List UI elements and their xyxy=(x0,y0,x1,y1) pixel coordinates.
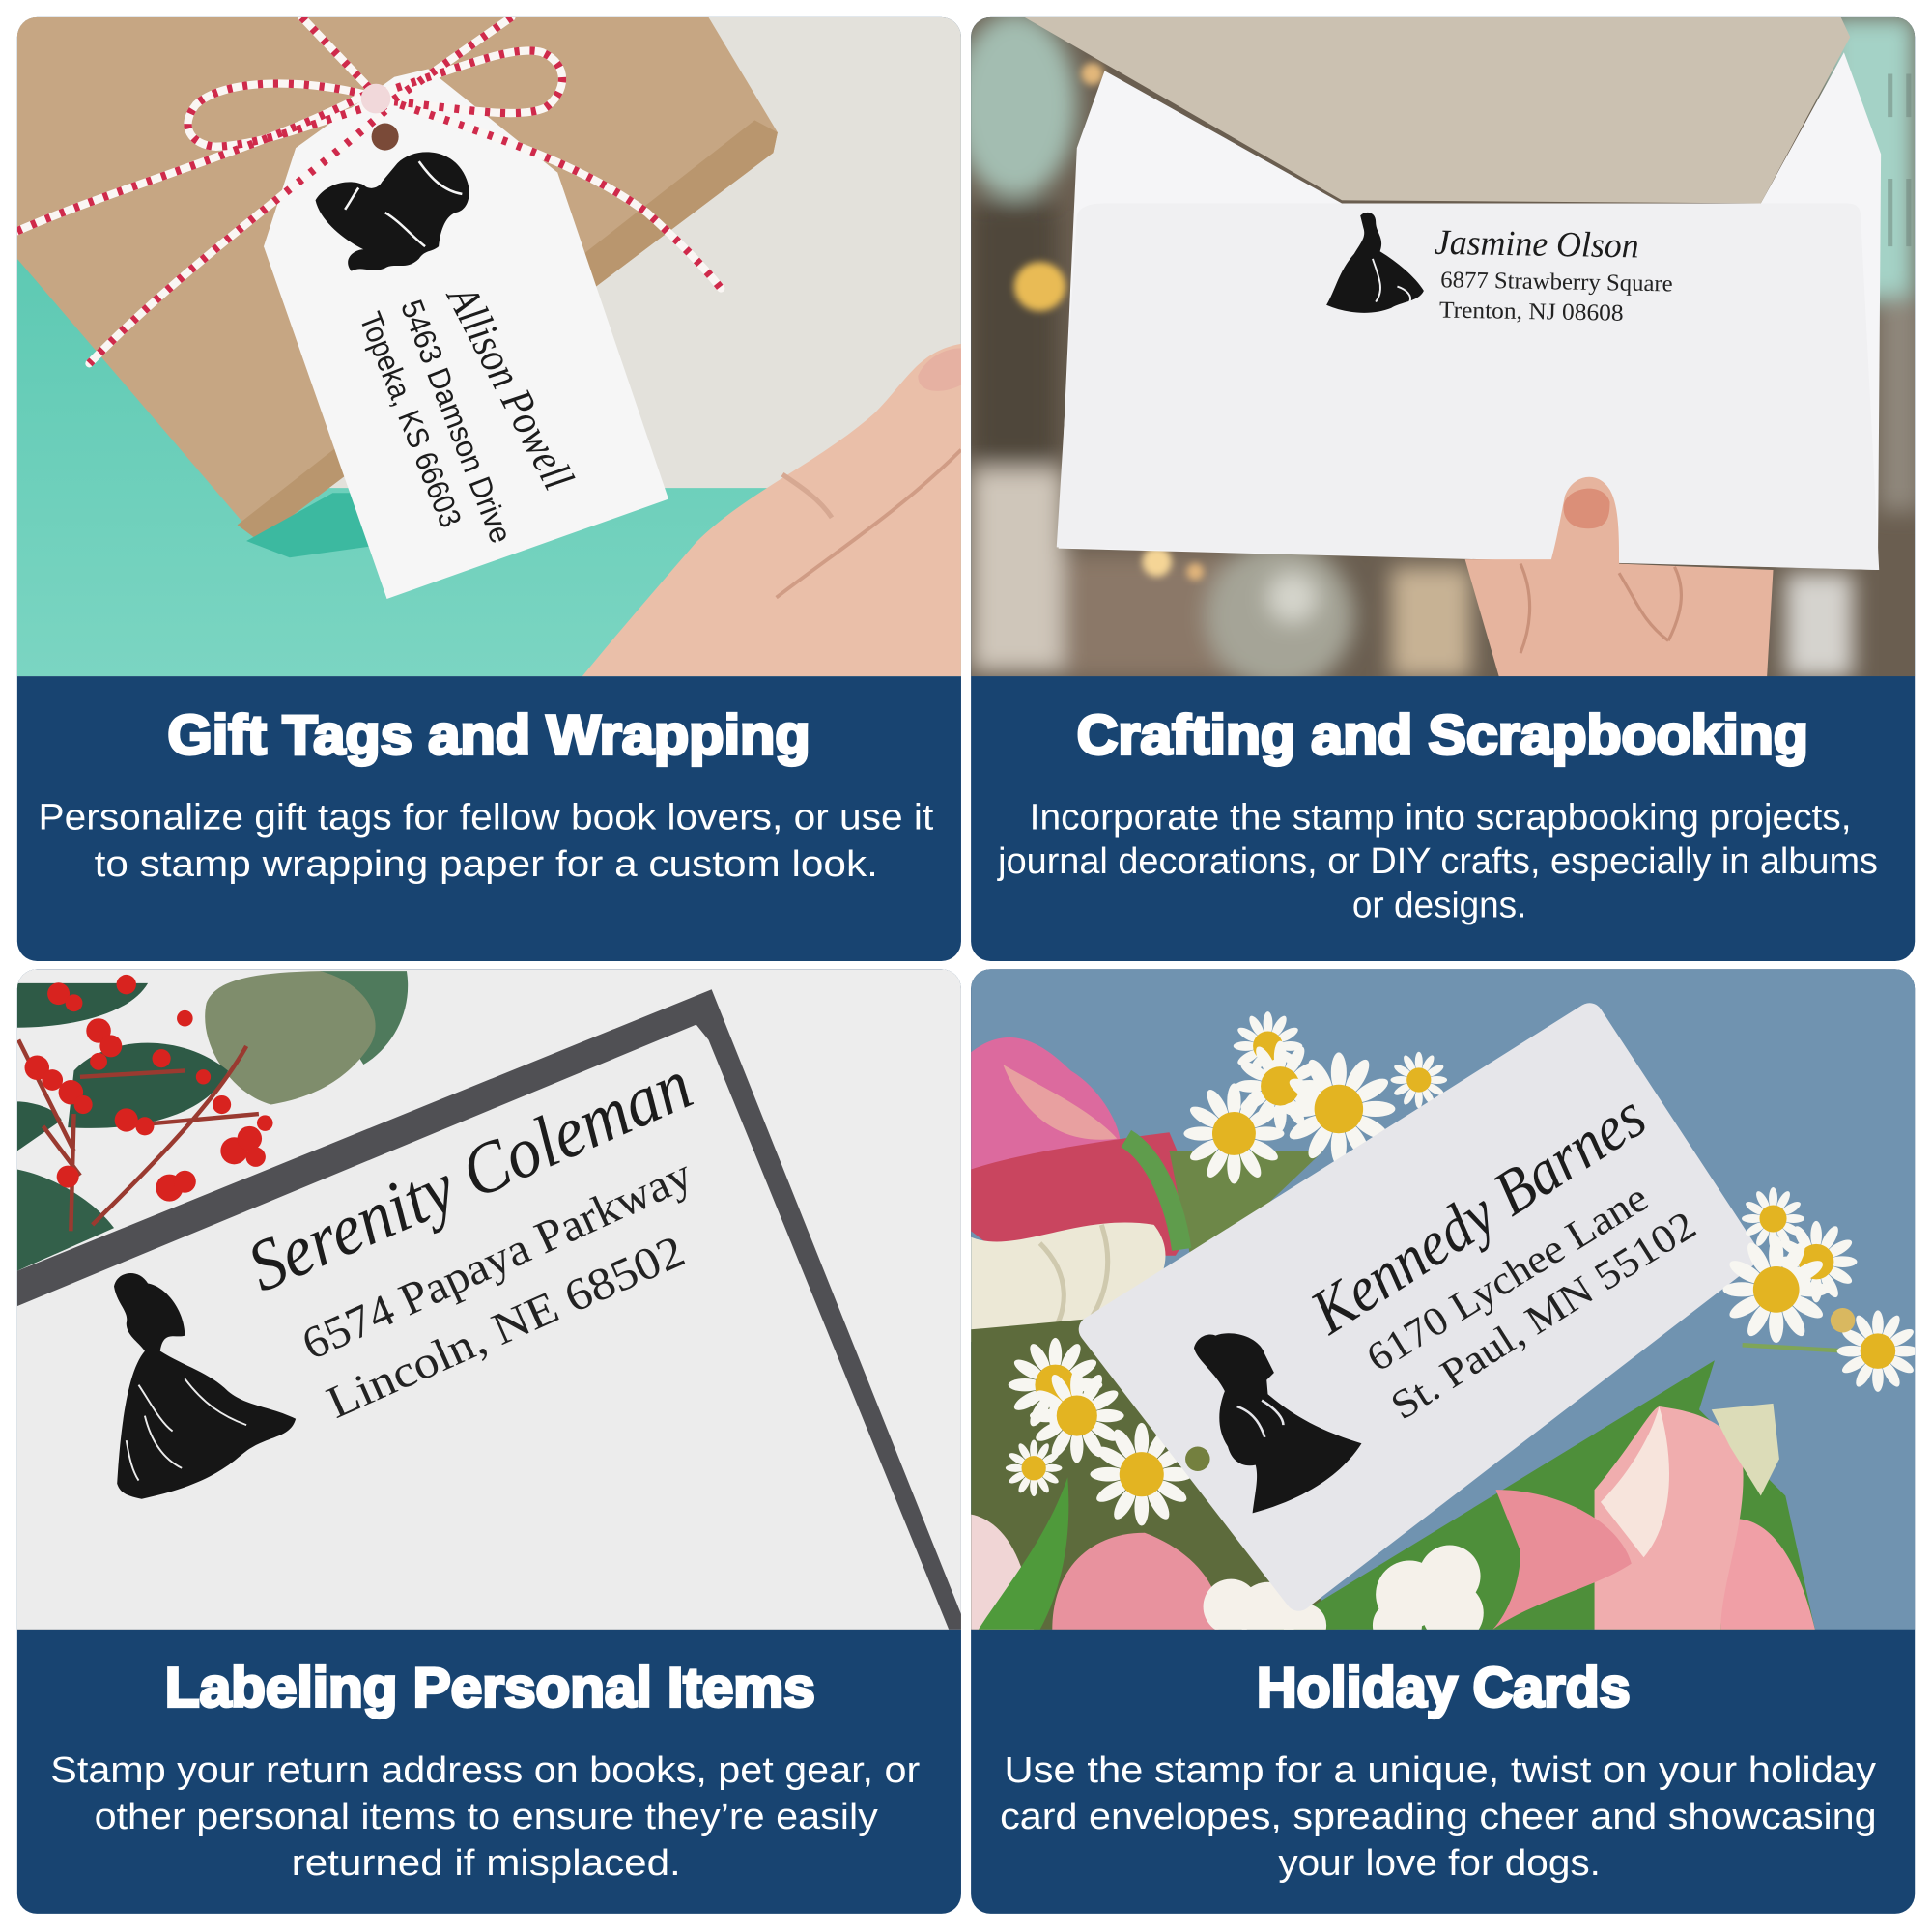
stamp: name: Allison Powell xyxy=(437,275,583,497)
daisies behind card xyxy=(1006,1011,1447,1526)
book page xyxy=(17,1025,949,1630)
description line 1: Personalize gift tags for fellow book lovers, or use it xyxy=(39,796,934,838)
description line 2: card envelopes, spreading cheer and showcasing xyxy=(1000,1796,1877,1837)
heading: Holiday Cards xyxy=(1257,1658,1631,1719)
bouquet behind card xyxy=(971,1037,1868,1650)
description line 2: journal decorations, or DIY crafts, especially in albums xyxy=(997,840,1878,882)
description line 1: Stamp your return address on books, pet gear, or xyxy=(50,1749,921,1791)
panel: holiday cards xyxy=(971,969,1918,1914)
tag xyxy=(264,69,668,599)
stamp: princess gown silhouette xyxy=(114,1273,296,1499)
stamp: name: Kennedy Barnes xyxy=(1298,1081,1658,1349)
stamp: city line: Lincoln, NE 68502 xyxy=(320,1226,692,1429)
photo: gift box with tag xyxy=(17,17,961,676)
stamp: street address: 6877 Strawberry Square xyxy=(1440,267,1673,297)
hand xyxy=(582,344,961,676)
photo: book with stamped address xyxy=(17,969,967,1630)
description line 2: other personal items to ensure they’re easily xyxy=(95,1796,879,1837)
blurred background xyxy=(953,13,1921,690)
card xyxy=(1093,1016,1746,1598)
stamp: street address: 6574 Papaya Parkway xyxy=(295,1150,700,1370)
stamp: girl silhouette xyxy=(1194,1333,1361,1513)
panel: gift tags and wrapping xyxy=(17,17,961,961)
envelope back xyxy=(1059,52,1881,570)
description line 1: Incorporate the stamp into scrapbooking projects, xyxy=(1030,796,1852,838)
stamp: name: Jasmine Olson xyxy=(1435,223,1639,266)
stamp: princess gown silhouette xyxy=(1326,213,1424,313)
description line 3: returned if misplaced. xyxy=(292,1842,681,1884)
twine xyxy=(17,17,721,363)
daisies in front of card xyxy=(1722,1187,1918,1392)
stamp: name: Serenity Coleman xyxy=(237,1044,703,1308)
hand xyxy=(1465,477,1774,676)
book cover xyxy=(17,989,967,1630)
photo: card in bouquet xyxy=(971,969,1918,1650)
photo: envelope held by hand xyxy=(953,13,1921,690)
stamp: street address: 6170 Lychee Lane xyxy=(1359,1175,1656,1380)
heading: Crafting and Scrapbooking xyxy=(1077,705,1808,767)
description line 1: Use the stamp for a unique, twist on your holiday xyxy=(1005,1749,1877,1791)
paper insert xyxy=(1025,17,1850,203)
description line 3: or designs. xyxy=(1352,885,1526,926)
foliage and red flowers xyxy=(17,971,408,1271)
description line 3: your love for dogs. xyxy=(1278,1842,1601,1884)
stamp: city line: Topeka, KS 66603 xyxy=(353,307,469,532)
stamp: woman silhouette xyxy=(316,152,469,271)
envelope front xyxy=(1057,410,1880,570)
stamp: street address: 5463 Damson Drive xyxy=(394,295,519,548)
panel: crafting and scrapbooking xyxy=(953,13,1921,961)
description line 2: to stamp wrapping paper for a custom look. xyxy=(95,843,878,885)
stamp: city line: Trenton, NJ 08608 xyxy=(1439,297,1624,327)
heading: Gift Tags and Wrapping xyxy=(167,705,810,767)
stamp: city line: St. Paul, MN 55102 xyxy=(1383,1203,1704,1429)
heading: Labeling Personal Items xyxy=(165,1658,815,1719)
panel: labeling personal items xyxy=(17,969,967,1914)
